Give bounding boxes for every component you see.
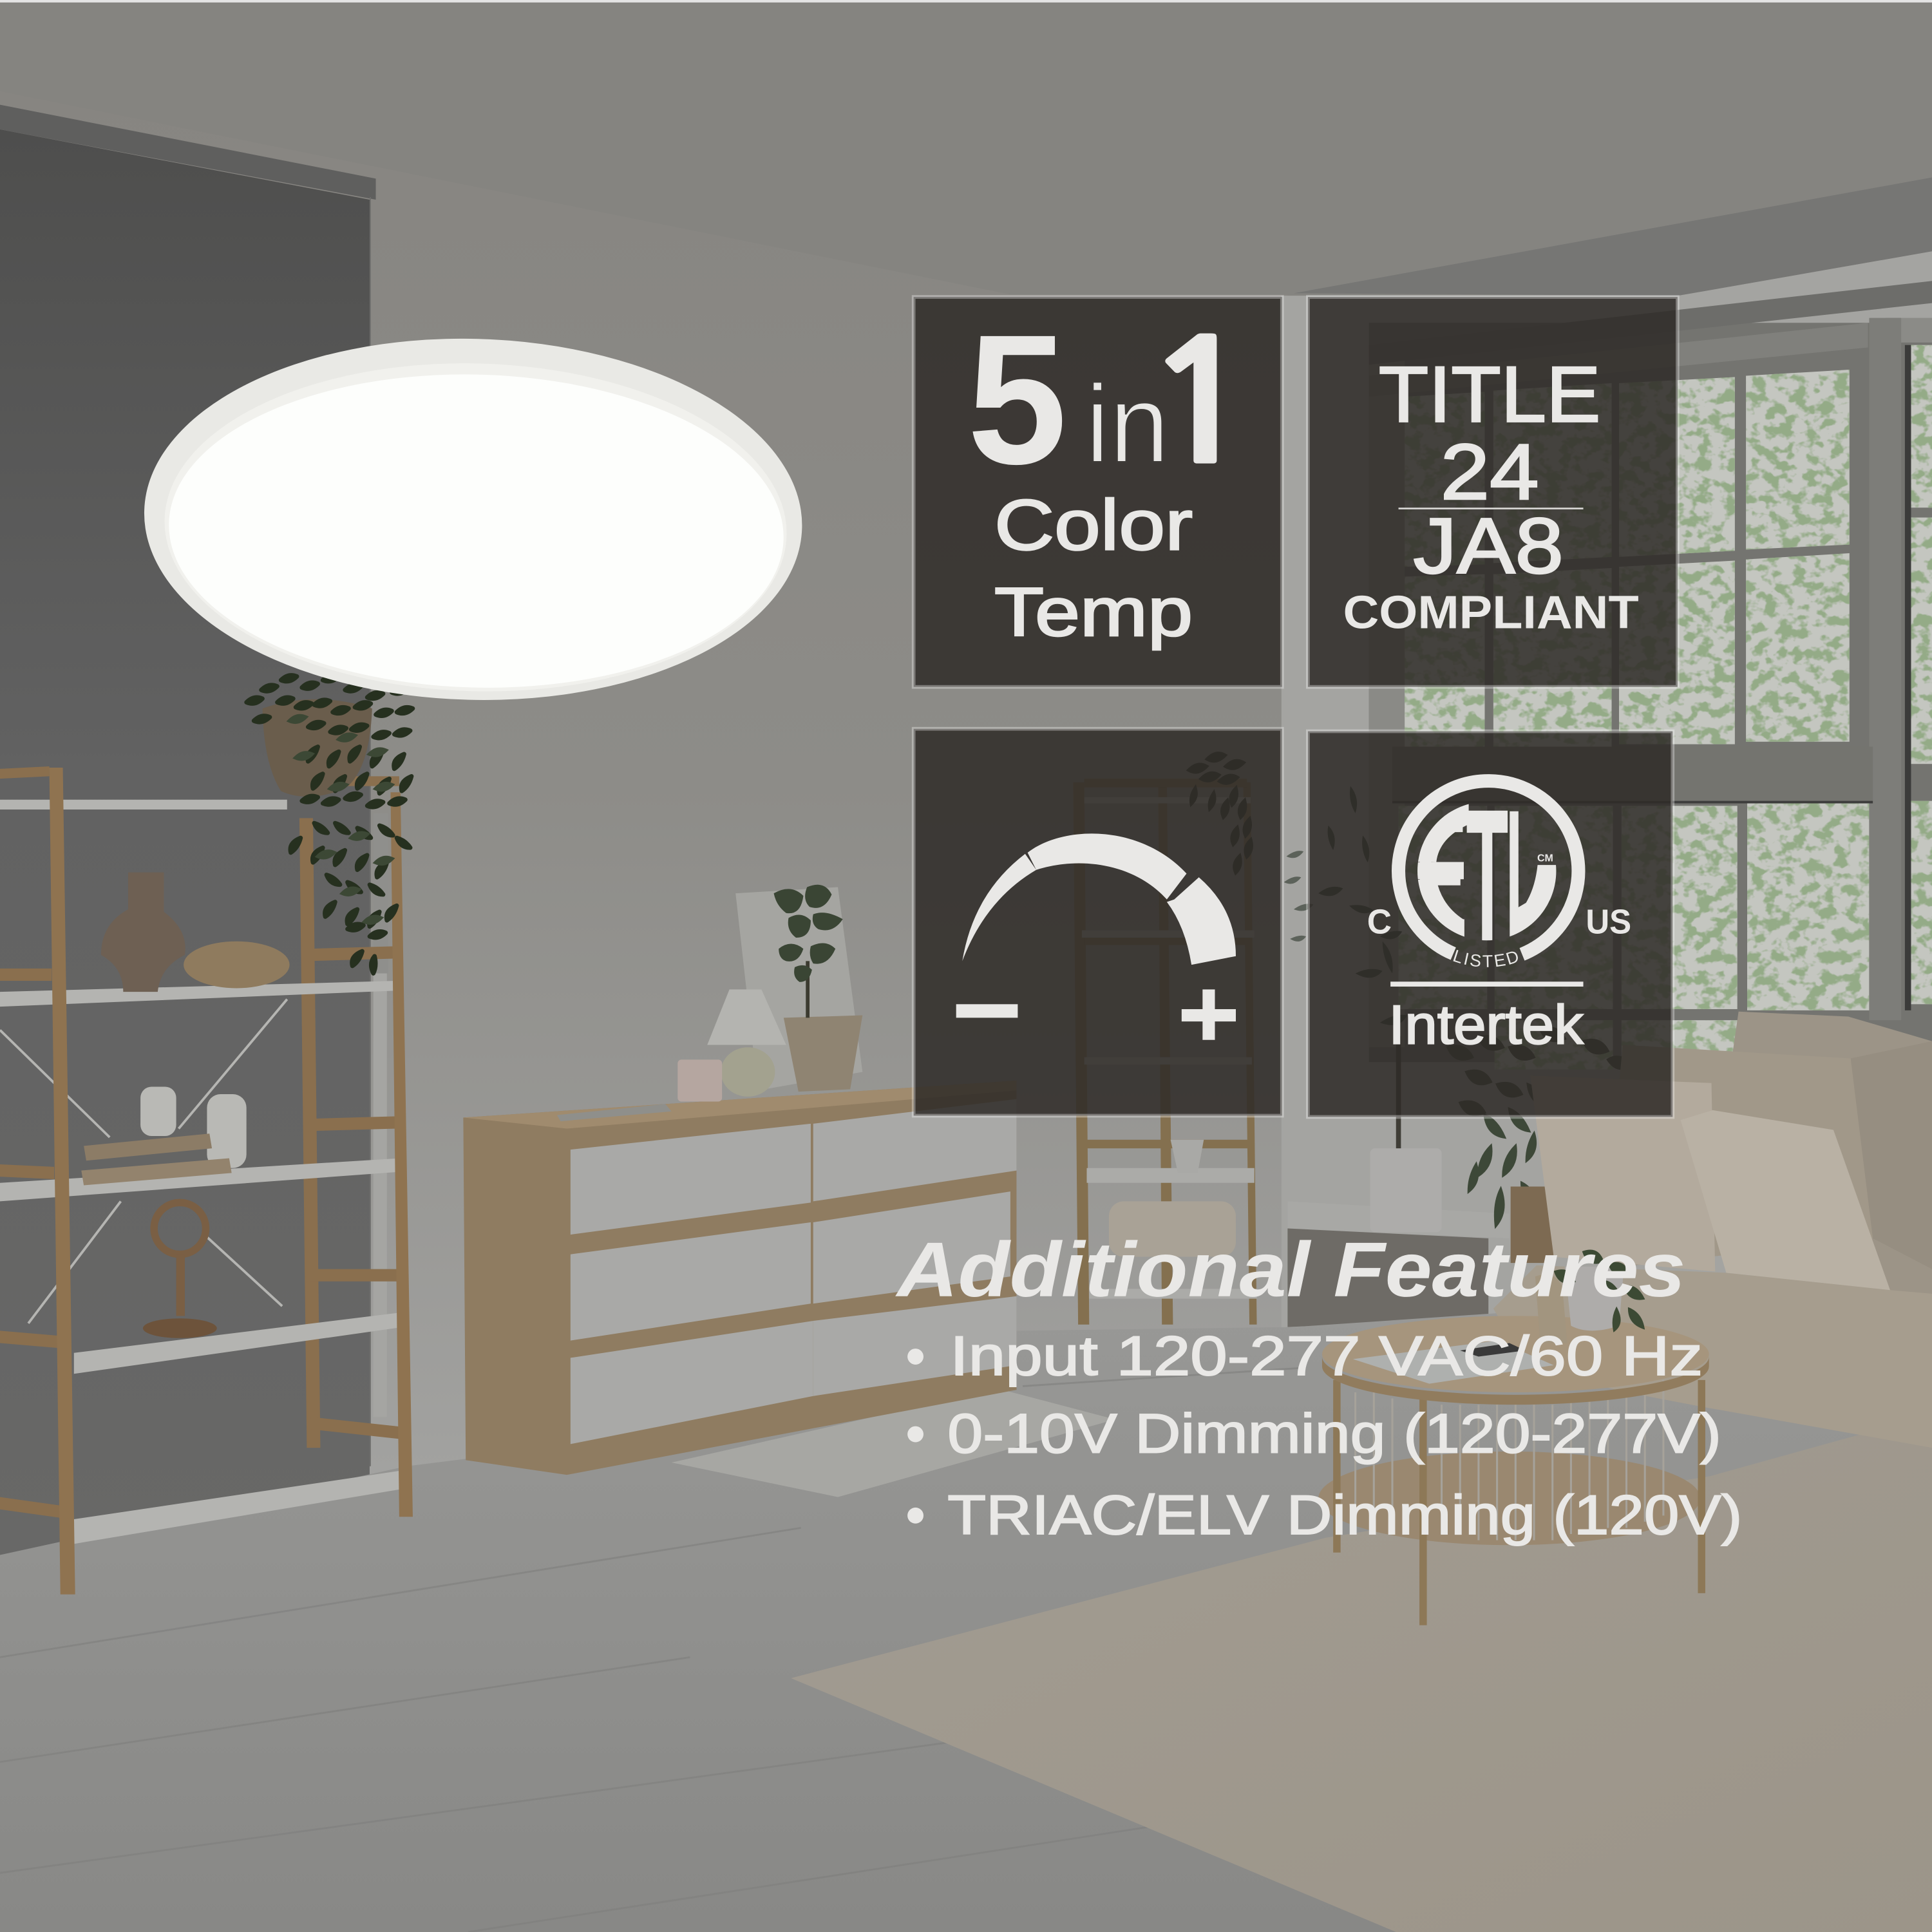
outer white rim [140,330,807,708]
bullet: input voltage: Input 120-277 VAC/60 Hz [950,1325,1703,1387]
dark leaves [247,675,413,973]
dark roller blind on left wall [0,105,388,1565]
ceiling [0,0,1932,394]
text: Intertek: Intertek [1388,995,1584,1056]
logo ring [1399,781,1578,954]
badge curves [1417,804,1556,936]
background shelf [1073,779,1257,1325]
broad leaf plant behind sofa [1448,1028,1630,1226]
bullet: 0-10V dimming: 0-10V Dimming (120-277V) [947,1403,1721,1465]
table planter [1565,1267,1624,1331]
heading: 5 in 1: in [1086,362,1170,486]
text: JA8: JA8 [1414,502,1564,590]
logo: ETL mark: L [1506,771,1542,980]
icon: minus [956,1004,1018,1018]
heading: 5 in 1: 1 [1141,321,1260,488]
heading: 5 in 1: 5 [967,296,1067,502]
text: CM: CM [1537,852,1553,864]
icon: dimmer arc [962,833,1236,965]
right window wall [1282,178,1932,1356]
text: COMPLIANT: COMPLIANT [1343,587,1639,639]
background shelf plant [1189,753,1251,873]
corded pillow rear [1530,1075,1715,1271]
rear uprights and rungs [0,766,402,1518]
shelf objects [101,873,185,992]
shelf braces [0,999,287,1323]
divider line [1390,981,1584,987]
heading: 5 in 1 [967,296,1260,502]
panel: ETL listed Intertek [1306,729,1674,1119]
inner bezel [160,355,791,699]
text: TITLE: TITLE [1379,350,1600,438]
drawer fronts [571,1099,1016,1444]
shelf boards [0,800,405,1544]
decor on dresser [557,885,862,1121]
front uprights [50,768,413,1595]
panel: dimming [914,729,1282,1115]
text: Temp: Temp [994,573,1193,650]
back wall [0,91,1287,1479]
lower sash rail [1392,746,1873,801]
glowing diffuser [165,366,788,696]
coffee table [1318,1251,1709,1625]
tree planter [1370,1148,1442,1232]
tall potted tree [1284,786,1442,1232]
letters ETL clipped to round badge: T [1466,771,1508,980]
text: LISTED: LISTED [1453,949,1518,967]
window roller shades [1369,323,1868,397]
window panes with foliage [1399,345,1932,1070]
letters ETL clipped to round badge: E [1414,771,1468,980]
woven basket [263,699,372,797]
text: 24: 24 [1441,428,1539,516]
panel: Title 24 JA8 compliant [1308,297,1678,687]
panel: 5 in 1 color temp [914,296,1282,687]
woven basket [1109,1201,1236,1257]
wood sofa arm [1511,1186,1554,1263]
text: US: US [1586,903,1631,941]
additional features block [895,1226,1742,1546]
hanging plant [247,675,413,973]
window pillar [1869,318,1901,1020]
left bookshelf [0,766,413,1595]
mid green leaves [290,716,392,923]
bullet: TRIAC/ELV dimming: TRIAC/ELV Dimming (120V) [947,1484,1742,1546]
top edge highlight [0,0,1932,3]
flat panel ceiling light [140,330,807,708]
dresser [463,1081,1016,1475]
letters ETL clipped to round badge [1417,804,1556,940]
large beige rug [791,1414,1932,1932]
icon: plus [1182,989,1236,1040]
window ledge [1287,1201,1510,1238]
logo: ETL mark [1392,774,1586,967]
sofa [1493,1012,1932,1448]
small planter [1171,1140,1204,1173]
divider line [1399,507,1584,509]
listed baseline arc [1432,950,1542,967]
text: Color: Color [994,485,1193,565]
light wall below window [1283,1070,1529,1229]
text: C: C [1367,903,1392,941]
magazine [1353,1341,1554,1384]
heading: Additional Features: Additional Features [895,1226,1685,1313]
corded pillow front [1681,1110,1890,1290]
floor [0,1306,1932,1932]
small woven rug [672,1388,1115,1497]
